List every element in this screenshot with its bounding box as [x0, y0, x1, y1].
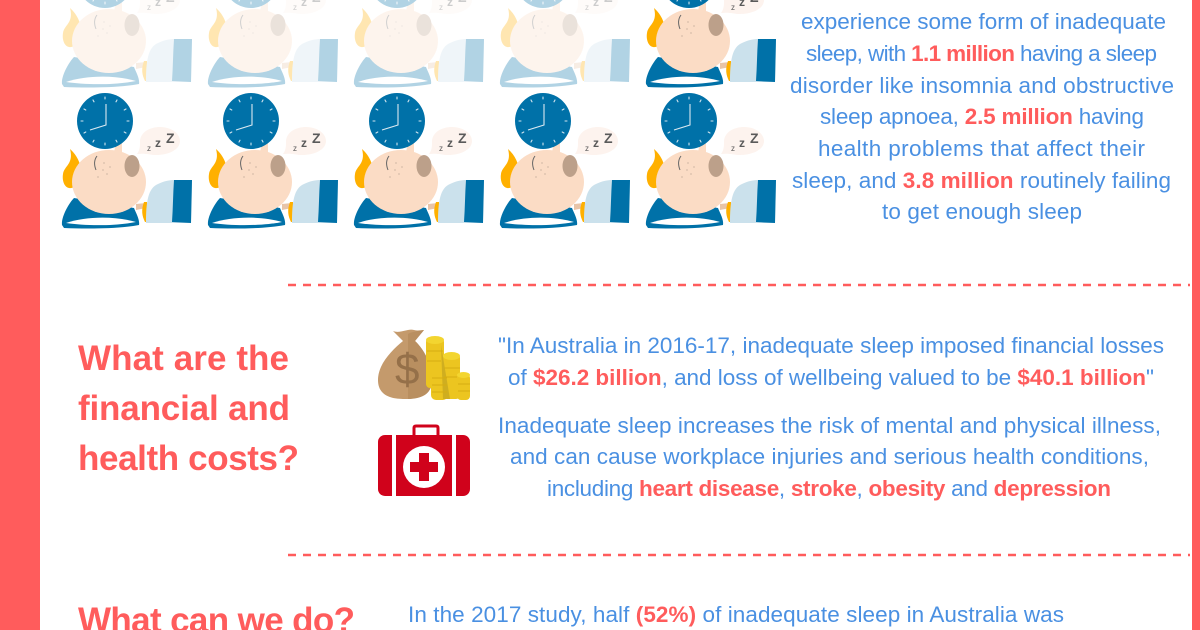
pictogram: sleeping people grid: [62, 0, 776, 229]
right coral border: [1192, 0, 1200, 630]
heading: financial and health costs: [78, 339, 299, 478]
heading: financial and health costs: financial and: [78, 389, 290, 428]
text block: prevalence of inadequate sleep: experience some form of inadequate: [801, 9, 1166, 34]
text block: prevalence of inadequate sleep: sleep apnoea, 2.5 million having: [820, 104, 1144, 129]
text block: financial losses quote: "In Australia in 2016-17, inadequate sleep imposed financial losses: [498, 333, 1164, 358]
text block: health risks: and can cause workplace injuries and serious health conditions,: [510, 444, 1149, 469]
text block: health risks: [498, 413, 1161, 501]
icon: first aid kit: [378, 426, 470, 496]
text block: prevalence of inadequate sleep: to get enough sleep: [882, 199, 1082, 224]
text block: prevalence of inadequate sleep: health problems that affect their: [818, 136, 1146, 161]
text block: health risks: including heart disease, stroke, obesity and depression: [547, 476, 1111, 501]
icon: money bag and coins: [378, 330, 470, 400]
text block: financial losses quote: [498, 333, 1164, 390]
row 2: full colour sleepers: [62, 93, 776, 229]
text block: prevalence of inadequate sleep: sleep, and 3.8 million routinely failing: [792, 168, 1171, 193]
left coral border: [0, 0, 40, 630]
heading: financial and health costs: What are the: [78, 339, 289, 378]
heading: financial and health costs: health costs?: [78, 439, 299, 478]
text block: health risks: Inadequate sleep increases the risk of mental and physical illness,: [498, 413, 1161, 438]
text block: financial losses quote: of $26.2 billion, and loss of wellbeing valued to be $40.1 billion": [508, 365, 1154, 390]
icon: money bag and coins: $: [395, 345, 419, 394]
text block: prevalence of inadequate sleep: [790, 9, 1174, 224]
row 1: faded sleepers: [62, 0, 776, 88]
text block: prevalence of inadequate sleep: sleep, with 1.1 million having a sleep: [806, 41, 1157, 66]
text block: 2017 study: In the 2017 study, half (52%) of inadequate sleep in Australia was: [408, 602, 1064, 627]
text block: prevalence of inadequate sleep: disorder like insomnia and obstructive: [790, 73, 1174, 98]
